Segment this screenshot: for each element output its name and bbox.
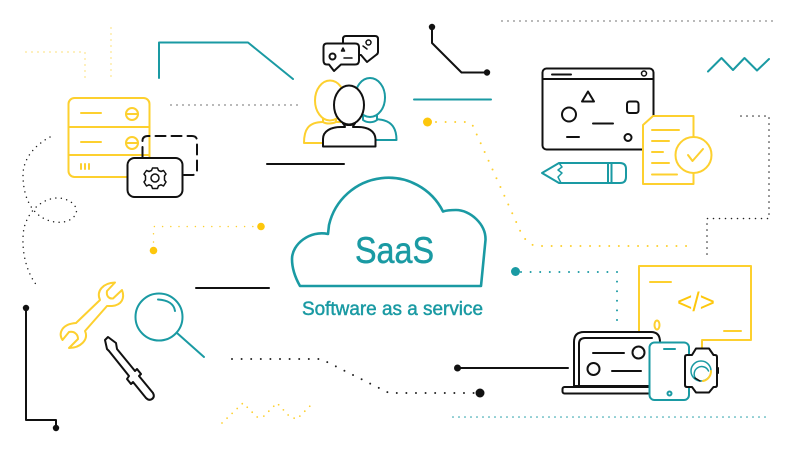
cloud [292, 178, 486, 286]
connector: top left yellow dotted lines [26, 28, 111, 79]
chat bubbles icon [324, 36, 378, 71]
people icon [304, 78, 396, 146]
connector: yellow dotted line left of cloud [150, 223, 265, 254]
wrench icon [61, 282, 123, 348]
settings panel icon with gear [128, 136, 197, 197]
code symbol: </> [677, 287, 715, 317]
design window icon [542, 68, 654, 150]
title: SaaS: SaaS [355, 230, 434, 271]
icon: teal zigzag [708, 58, 769, 72]
subtitle: Software as a service [302, 299, 483, 320]
icon: gear [144, 168, 166, 188]
connector: black line below people [267, 163, 344, 165]
magnifier icon [136, 294, 204, 357]
teal person [355, 78, 396, 140]
connector: teal line [414, 98, 491, 100]
connector: curly dotted line left [23, 137, 76, 287]
connector: teal angled line [159, 42, 293, 79]
connector: yellow dotted zigzag [222, 403, 311, 423]
black person [323, 86, 376, 146]
connector: top right dotted line [502, 20, 778, 22]
code panel icon [639, 266, 751, 348]
connector: black circuit line top [429, 24, 490, 76]
connector: teal dotted line [511, 267, 617, 322]
screwdriver icon [105, 337, 154, 400]
connector: black line to laptop [454, 364, 568, 372]
document with check icon [643, 116, 712, 184]
yellow person [304, 80, 345, 143]
connector: right dotted path [707, 116, 769, 255]
connector: yellow dotted path to code panel [423, 118, 688, 246]
pencil icon [542, 163, 626, 183]
connector: dotted line above server [171, 104, 301, 106]
connector: black dotted line bottom [232, 359, 484, 398]
watch icon [685, 348, 718, 392]
phone icon [650, 342, 689, 400]
connector: black circuit line left [23, 305, 59, 431]
server icon [68, 98, 150, 177]
connector: black line left of cloud [196, 287, 269, 289]
laptop icon [562, 332, 662, 394]
connector: teal dotted line bottom [453, 416, 766, 418]
